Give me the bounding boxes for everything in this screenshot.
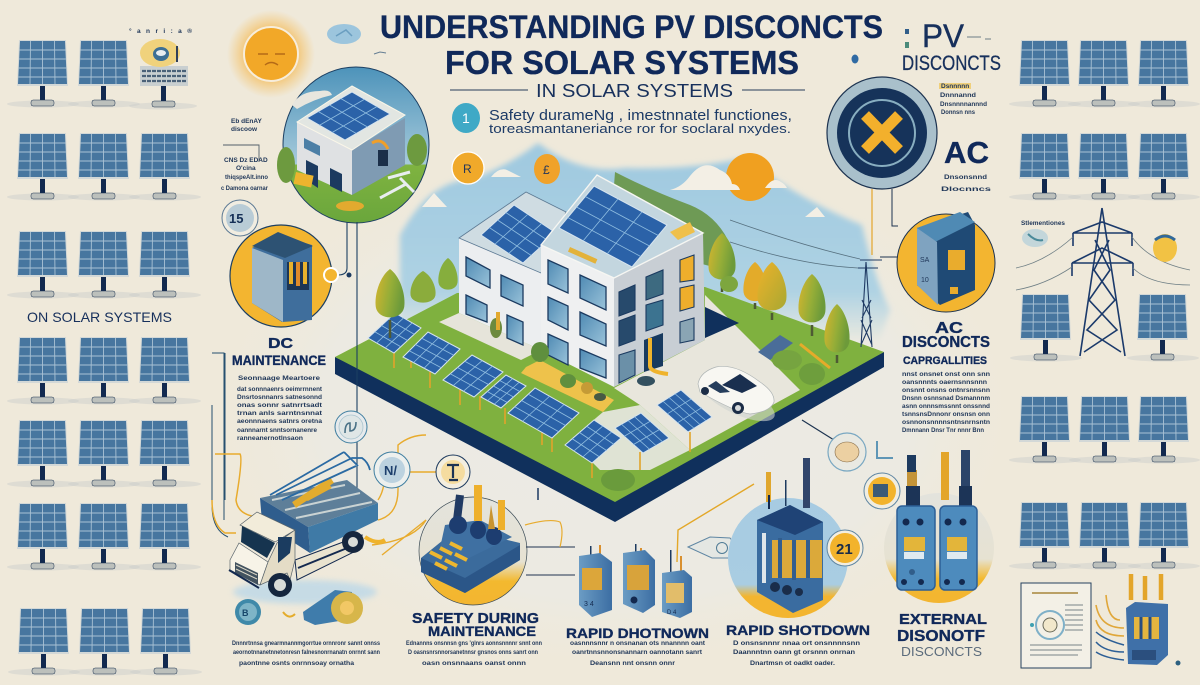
right mini text: Donnsn nns: [941, 109, 975, 116]
sign on third post: [129, 27, 197, 110]
rapid label 2 text: Daannntnn oann gt orsnnn onrnan: [733, 649, 855, 656]
PV heading right: DISCONCTS: [902, 52, 1001, 75]
icon: number 1: 1: [462, 110, 470, 126]
upper left text fragments: O'cina: [236, 165, 256, 172]
upper left text fragments: CNS Dz EDAD: [224, 157, 268, 164]
body text: ranneanernotlnsaon: [237, 435, 303, 442]
safety body text: Ednannns onsnnsn gns 'glnrs aonnsnnnnr snnt onn: [406, 640, 542, 647]
post shadows and legs: [394, 353, 690, 478]
AC disconnect labels right: DISCONCTS: [902, 334, 990, 351]
right block: [541, 175, 705, 387]
external heading: [897, 611, 987, 659]
yellow X: [865, 115, 899, 150]
tower icons: Stlementiones: [1021, 220, 1065, 227]
AC body text: nnst onsnet onst onn snn: [902, 371, 990, 378]
upper left text fragments: c Damona oarnar: [221, 185, 268, 192]
AC disconnect labels right: CAPRGALLITIES: [903, 355, 987, 367]
front path: [439, 313, 541, 360]
coins row: [452, 152, 560, 184]
AC label right: Dlocnncs: [941, 186, 992, 193]
isometric platform: [335, 287, 884, 522]
left panel row 7: [8, 608, 202, 676]
icon: 15 badge: 15: [229, 211, 243, 226]
icon: connector plug: [688, 537, 738, 558]
device left: [897, 455, 935, 590]
PV heading right: [852, 18, 1001, 75]
upper left text fragments: thiqspeAlt.inno: [225, 174, 268, 181]
right panel row 3: [1010, 294, 1199, 362]
rapid shutdown label 2: RAPID SHOTDOWN: [726, 622, 870, 638]
right yard details: [538, 335, 830, 500]
upper left text fragments: [221, 118, 268, 192]
schematic document: [1021, 583, 1091, 668]
wheels: [268, 573, 292, 597]
left panel row 5: [7, 420, 201, 488]
document and switch: [1021, 574, 1180, 668]
icon: small cloud: [327, 24, 386, 54]
right panel row 5: [1009, 502, 1200, 570]
AC body text: osnnonsnnnnsntnsnrnsntn: [902, 419, 990, 426]
device 1: 3 4: [584, 601, 594, 608]
right mini text: Dnsnnnnannnd: [940, 101, 987, 108]
intro point: [452, 103, 792, 136]
rapid shotdown label 1: RAPID DHOTNOWN: [566, 625, 709, 641]
upper left text fragments: Eb dEnAY: [231, 118, 262, 125]
left connector lines: [212, 353, 436, 555]
icon: teal badge: B: [242, 608, 249, 618]
icon: small circle badge 3: [436, 455, 470, 489]
AC body text: onsnnt onsns ontnrsnnsnn: [902, 387, 990, 394]
AC label right: [941, 135, 992, 193]
chassis: [295, 535, 362, 580]
title: FOR SOLAR SYSTEMS: [445, 44, 799, 81]
external heading: DISONOTF: [897, 628, 985, 645]
wires: [1096, 595, 1124, 636]
right mini text: Dsnnnnn: [941, 83, 969, 90]
platform top: [335, 287, 884, 502]
body text: oannnarnt snntsornanenre: [237, 427, 317, 434]
intro text: toreasmantaneriance ror for soclaral nxydes.: [489, 121, 791, 136]
truck caption: [232, 640, 380, 667]
upper left text fragments: discoow: [231, 126, 258, 133]
external heading: DISCONCTS: [901, 644, 982, 659]
heading: MAINTENANCE: [232, 352, 326, 368]
title: UNDERSTANDING PV DISCONCTS: [380, 9, 883, 45]
external heading: EXTERNAL: [899, 611, 987, 628]
body text: onas sonnr satnrrtsadt: [237, 402, 323, 409]
cables: [270, 452, 370, 500]
left panel row 1: [7, 27, 197, 110]
body text: trnan anls sarntnsnnat: [237, 410, 323, 417]
icon: L bracket: [877, 441, 893, 458]
external disconnect circle: [884, 450, 994, 603]
body text: Dnsrtosnnanrs satnesonnd: [237, 394, 322, 401]
body text: dat sonnnaenrs oeimrrnnent: [237, 386, 323, 393]
rapid shutdown devices: [579, 544, 692, 618]
planter details: [531, 342, 655, 401]
X disconnect dial: [827, 77, 937, 189]
title: [380, 9, 883, 81]
device right: [940, 450, 977, 590]
icon: small circle badge 2: [374, 452, 410, 488]
rapid shutdown circle: [728, 458, 848, 618]
sky backdrop: [400, 143, 890, 340]
intro text: Safety durameNg , imestnnatel functiones,: [489, 107, 792, 124]
AC body text: Dnsnn osnnsnad Dsmannnm: [902, 395, 990, 402]
safety body text: oasn onsnnaans oanst onnn: [422, 660, 526, 667]
intro text: [489, 107, 792, 136]
heading: DC: [268, 335, 293, 352]
AC label right: Dnsonsnnd: [944, 174, 987, 181]
AC label right: AC: [944, 135, 989, 170]
ground solar arrays: [368, 313, 712, 478]
sun behind building: [726, 153, 774, 201]
safety heading: MAINTENANCE: [428, 623, 536, 639]
icon: small coin: [828, 433, 866, 471]
left block: [459, 192, 566, 350]
clouds: [422, 165, 825, 217]
right panel row 2: [1009, 133, 1200, 200]
heading: [232, 335, 326, 368]
sun with face: [227, 10, 315, 98]
building shadow: [705, 307, 739, 338]
rapid label 1 text: Deansnn nnt onsnn onnr: [590, 660, 676, 667]
DC disconnect circle: [230, 225, 352, 327]
right panel row 4: [1009, 396, 1200, 464]
AC disconnect circle: SA: [920, 257, 930, 264]
sign on third post: ° a n r i : a ®: [129, 27, 192, 35]
body text: aeonnnaens satnrs oretna: [237, 418, 322, 425]
switch box: [1126, 574, 1180, 666]
distant hill: [610, 172, 728, 270]
AC disconnect labels right: [902, 320, 990, 367]
driveway: [614, 295, 800, 450]
device 3: D 4: [667, 610, 677, 616]
rapid label 2 text: [733, 640, 860, 667]
AC body text: asnn onnnsmssnnt onssnnd: [902, 403, 990, 410]
rapid label 1 text: oasnnnsnnr n onsnanan ots nnannnn oant: [570, 640, 706, 647]
subtitle: IN SOLAR SYSTEMS: [536, 81, 733, 101]
transmission tower: [1016, 208, 1190, 356]
upper left circle scene: [277, 67, 429, 223]
truck caption: paontnne osnts onrnnsoay ornatha: [239, 660, 354, 667]
left panel row 4: [7, 337, 201, 404]
coin 2: £: [543, 163, 550, 177]
icon: yellow badge: [864, 473, 900, 509]
body text: Seonnaage Meartoere: [238, 375, 320, 382]
side windows: [619, 255, 694, 383]
main building: [459, 175, 705, 387]
icon: teal badge: [235, 599, 261, 625]
PV heading right: PV: [922, 18, 965, 54]
cargo rails: [272, 485, 372, 518]
right mini text: Dnnnannd: [940, 92, 976, 99]
truck caption: Dnnnrtnnsa gnearmnannmgorrtue ornnronr sannt onnss: [232, 640, 380, 647]
AC body text: Dmnnann Dnsr Tnr nnnr Bnn: [902, 427, 984, 434]
cargo side: [308, 503, 378, 553]
planter strip: [521, 360, 614, 412]
icon: small circle badge 2: N/: [384, 463, 397, 478]
icon: number 1: [452, 103, 480, 133]
front windows: [548, 260, 606, 378]
device 2: [623, 544, 655, 613]
AC body text: tsnnsnsDnnonr onsnsn onn: [902, 411, 990, 418]
connector lines dial: [880, 189, 898, 257]
right panel row 1: [1009, 40, 1200, 108]
rapid label 1 text: [570, 640, 706, 667]
safety heading: [412, 610, 539, 639]
connector lines upper left: [330, 222, 357, 510]
icon: small circle badge 1: [335, 411, 367, 443]
left panel row 6: [7, 503, 201, 570]
connector lines center: [526, 547, 575, 575]
coin 21 badge: [827, 530, 863, 566]
utility pole and wires: [730, 220, 882, 347]
truck caption: aeornotnnanetnnetonresn falnesnonrnanatn onrnnt sann: [233, 649, 380, 656]
AC disconnect labels right: AC: [935, 320, 964, 337]
left panel row 3: [7, 231, 201, 298]
cargo top: [260, 480, 378, 527]
DC maintenance section: [232, 335, 326, 442]
door: [644, 333, 663, 372]
left panel row 2: [7, 133, 201, 200]
icon: cable roll: [283, 590, 363, 625]
label: on solar systems: ON SOLAR SYSTEMS: [27, 309, 172, 325]
coin 1: R: [463, 162, 472, 176]
coin 21 badge: 21: [836, 541, 853, 558]
service truck: [229, 452, 385, 604]
icon: 15 badge: [222, 200, 258, 236]
cab: [230, 512, 295, 585]
parked car: [696, 366, 780, 430]
trees: [375, 233, 850, 363]
AC disconnect circle: [897, 212, 995, 312]
safety body text: D oasnsnrsnnorsanetnnsr gnsnos onns sanrt onn: [408, 649, 538, 656]
tower icons: [1021, 220, 1177, 262]
rapid label 2 text: D onsnsnnnr nnaa ort onsnnnnsnn: [733, 640, 860, 647]
right solar panel grid: [1009, 40, 1200, 570]
AC disconnect circle: 10: [921, 277, 929, 284]
pale ground under front arrays: [570, 405, 690, 470]
right mini text: [939, 83, 987, 116]
rapid shutdown connector: [677, 484, 754, 562]
safety heading: SAFETY DURING: [412, 610, 539, 627]
rapid label 1 text: oanrtnnsnnonsnannarn oannotann sanrt: [572, 649, 703, 656]
left solar panel grid: [7, 27, 202, 676]
rapid label 2 text: Dnartmsn ot oadkt oader.: [750, 660, 835, 667]
AC body text: oansnnnts oaernsnnsnnn: [902, 379, 987, 386]
connector from platform: [802, 420, 834, 440]
safety body text: [406, 640, 542, 667]
equipment on truck: [294, 480, 332, 505]
platform side: [335, 352, 884, 522]
safety during maintenance circle: [419, 485, 527, 605]
AC body text: [902, 371, 990, 434]
body text: [237, 375, 323, 442]
